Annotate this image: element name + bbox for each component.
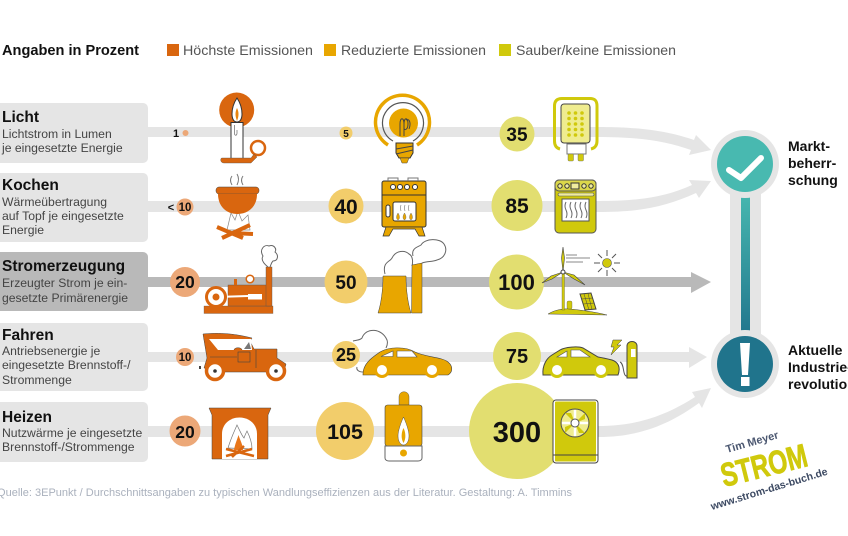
legend xyxy=(167,42,676,58)
value circles: Kochen: 10 xyxy=(179,202,191,214)
book logo: Tim Meyer xyxy=(725,429,781,456)
label: Marktbeherrschung: beherr- xyxy=(788,155,837,171)
value circles: Heizen xyxy=(170,383,565,479)
icon: incandescent bulb xyxy=(376,95,429,163)
icon: gas boiler xyxy=(385,392,422,461)
panel: Heizen xyxy=(0,402,148,462)
label: Aktuelle Industrierevolution: Aktuelle xyxy=(788,342,842,358)
icon: check mark badge xyxy=(711,130,779,198)
legend: Sauber/keine Emissionen xyxy=(516,42,676,58)
panel: Fahren: Fahren xyxy=(2,327,54,344)
arrow: Kochen xyxy=(148,180,711,212)
icon: cooling towers xyxy=(378,240,446,313)
icon: vintage car xyxy=(200,333,286,380)
icon: candle xyxy=(219,92,265,163)
value circles: Licht: 35 xyxy=(506,125,528,146)
panel: Kochen: Kochen xyxy=(2,177,59,194)
heading: Angaben in Prozent: Angaben in Prozent xyxy=(2,43,139,59)
book logo xyxy=(708,429,829,513)
value circles: Kochen: < xyxy=(168,202,174,214)
value circles: Stromerzeugung: 50 xyxy=(335,273,357,294)
value circles: Fahren: 10 xyxy=(179,352,191,364)
panel: Heizen: Heizen xyxy=(2,409,52,426)
icon: LED lamp xyxy=(554,98,597,161)
value circles: Heizen: 105 xyxy=(327,420,363,444)
panel: Licht xyxy=(0,103,148,163)
panel: Kochen: Energie xyxy=(2,223,44,237)
panel: Heizen: Nutzwärme je eingesetzte xyxy=(2,426,142,440)
book logo: www.strom-das-buch.de xyxy=(708,466,829,513)
icon: electric stove xyxy=(555,180,596,233)
panel: Licht: Lichtstrom in Lumen xyxy=(2,127,112,141)
legend: Reduzierte Emissionen xyxy=(341,42,486,58)
value circles: Licht: 1 xyxy=(173,128,179,140)
panel: Licht: je eingesetzte Energie xyxy=(1,141,123,155)
panel: Stromerzeugung xyxy=(0,252,148,311)
panel: Licht: Licht xyxy=(2,109,39,126)
value circles: Kochen: 85 xyxy=(505,195,529,218)
value circles: Licht xyxy=(173,116,534,152)
arrow: Heizen xyxy=(148,388,711,437)
value circles: Kochen xyxy=(168,180,542,231)
panel: Fahren: Strommenge xyxy=(2,373,72,387)
icon: combustion car with exhaust xyxy=(353,330,452,376)
value circles: Kochen: 40 xyxy=(334,196,358,219)
panel: Fahren: Antriebsenergie je xyxy=(2,344,100,358)
value circles: Stromerzeugung: 100 xyxy=(498,270,535,295)
value circles: Fahren xyxy=(176,332,541,380)
source note: Quelle: 3EPunkt / Durchschnittsangaben zu typischen Wandlungseffizienzen aus der Literatur. Gestaltung: A. Timmins xyxy=(0,487,572,499)
connector: Marktbeherrschung to Industrierevolution xyxy=(730,190,761,340)
book logo: STROM xyxy=(717,437,811,494)
icon: exclamation badge xyxy=(711,330,779,398)
panel: Stromerzeugung: gesetzte Primärenergie xyxy=(2,291,128,305)
value circles: Stromerzeugung xyxy=(170,254,544,310)
label: Marktbeherrschung: Markt- xyxy=(788,138,830,154)
icon: gas oven xyxy=(382,178,426,236)
panel: Heizen: Brennstoff-/Strommenge xyxy=(2,440,135,454)
icon: heat pump xyxy=(553,400,598,463)
value circles: Fahren: 75 xyxy=(506,346,528,368)
icon: steam engine xyxy=(204,246,277,314)
legend: Höchste Emissionen xyxy=(183,42,313,58)
panel: Stromerzeugung: Erzeugter Strom je ein- xyxy=(2,276,127,290)
arrow: Fahren xyxy=(148,347,707,368)
panel: Fahren: eingesetzte Brennstoff-/ xyxy=(2,358,131,372)
label: Marktbeherrschung: schung xyxy=(788,172,838,188)
icon: fireplace xyxy=(209,408,271,459)
icon: electric car and charger xyxy=(543,340,637,378)
value circles: Fahren: 25 xyxy=(336,345,356,365)
value circles: Licht: 5 xyxy=(343,129,349,140)
arrow: Stromerzeugung xyxy=(148,272,711,293)
value circles: Heizen: 20 xyxy=(175,422,195,442)
panel: Kochen: auf Topf je eingesetzte xyxy=(2,209,124,223)
value circles: Heizen: 300 xyxy=(493,417,541,449)
panel: Stromerzeugung: Stromerzeugung xyxy=(2,258,125,275)
panel: Kochen xyxy=(0,173,148,242)
arrow: Licht xyxy=(148,127,711,155)
panel: Kochen: Wärmeübertragung xyxy=(2,195,107,209)
panel: Fahren xyxy=(0,323,148,391)
value circles: Stromerzeugung: 20 xyxy=(175,272,195,292)
icon: wind turbine and solar panel xyxy=(542,247,620,315)
icon: cooking pot over fire xyxy=(216,174,259,238)
